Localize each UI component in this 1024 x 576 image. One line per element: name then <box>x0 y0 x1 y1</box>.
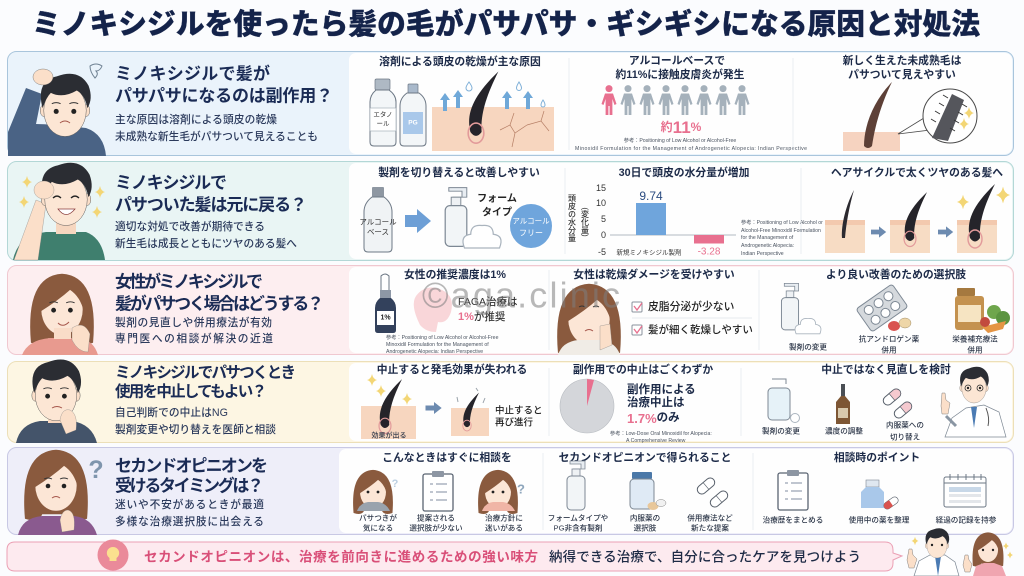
illustration: alcohol base to foam: アルコール <box>359 218 397 226</box>
sub heading: 新しく生えた未成熟毛は <box>843 53 962 67</box>
stat text <box>627 382 696 426</box>
heading <box>115 364 296 400</box>
icon: clipboard treatment history: 治療歴をまとめる <box>763 514 823 524</box>
icon: foam type <box>548 461 608 532</box>
sub heading: 製剤を切り替えると改善しやすい <box>378 165 540 179</box>
bar chart: scalp moisture: 0 <box>601 230 606 240</box>
body text: 製剤変更や切り替えを医師と相談 <box>115 423 276 436</box>
person: doctor pointing <box>941 367 1006 437</box>
sub heading: より良い改善のための選択肢 <box>826 267 966 281</box>
body text: 適切な対処で改善が期待できる <box>115 220 265 233</box>
icon: woman unsure of treatment: 治療方針に <box>485 512 523 522</box>
icon: concentration dropper <box>825 384 863 436</box>
banner message: セカンドオピニオンは、治療を前向きに進めるための強い味方 <box>144 548 538 564</box>
icon: supplements and vegetables: 栄養補充療法 <box>952 334 998 344</box>
stat text: 1.7%のみ <box>627 410 680 426</box>
icon: solvent bottles: ール <box>376 120 390 128</box>
icon: combination capsules: 併用療法など <box>687 512 733 522</box>
heading: ミノキシジルでパサつくとき <box>115 364 296 382</box>
reference: Indian Perspective <box>741 251 784 257</box>
icon: oral medication bottle: 内服薬の <box>630 512 660 522</box>
icon: antiandrogen blister: 併用 <box>881 344 897 354</box>
icon: oral capsules <box>881 387 924 442</box>
heading: ミノキシジルで <box>115 174 227 192</box>
heading: 髪がパサつく場合はどうする？ <box>115 294 324 314</box>
icon: current medication <box>849 480 910 524</box>
bar chart: scalp moisture: -3.28 <box>698 246 721 258</box>
body text <box>115 406 276 436</box>
bar chart: scalp moisture: 9.74 <box>639 189 663 203</box>
illustration: dry scalp <box>432 72 554 151</box>
icon: formulation change <box>762 379 800 436</box>
illustration: immature hair with magnifier <box>843 82 977 151</box>
icon: female head profile <box>414 288 452 332</box>
reference <box>610 429 712 444</box>
body text: 主な原因は溶剤による頭皮の乾燥 <box>115 113 277 126</box>
person: woman with hand on cheek <box>557 284 621 355</box>
body text <box>115 316 273 345</box>
sub heading: 溶剤による頭皮の乾燥が主な原因 <box>379 54 541 68</box>
sub heading: 中止ではなく見直しを検討 <box>821 362 951 376</box>
heading line 2: パサパサになるのは副作用？ <box>115 86 333 106</box>
icon: woman unsure of treatment <box>478 470 525 532</box>
illustration: alcohol base to foam <box>359 187 552 252</box>
icon: antiandrogen blister <box>856 284 920 354</box>
icon: solvent bottles: PG <box>408 120 418 126</box>
stat: 11 percent: 約11% <box>661 118 702 136</box>
reference <box>575 136 807 152</box>
icon: woman unsure of treatment: 迷いがある <box>485 522 523 532</box>
icon: clipboard few options: 提案される <box>417 512 455 522</box>
icon: woman worried about dryness: ? <box>392 478 399 490</box>
body text: 専門医への相談が解決の近道 <box>115 332 273 345</box>
body text <box>115 498 264 528</box>
icon: clipboard treatment history <box>763 470 823 524</box>
body text: 製剤の見直しや併用療法が有効 <box>115 316 272 329</box>
heading: 受けるタイミングは？ <box>115 476 264 496</box>
icon: formulation change: 製剤の変更 <box>762 426 800 436</box>
reference: Minoxidil Formulation for the Management of <box>386 342 489 348</box>
illustration: hair before and after stopping <box>361 374 543 440</box>
heading: 使用を中止してもよい？ <box>115 382 267 400</box>
bar chart: scalp moisture: 新規ミノキシジル製剤 <box>616 248 682 256</box>
person: worried man <box>8 64 106 156</box>
people: doctor and woman <box>907 528 1013 576</box>
icon: combination capsules: 新たな提案 <box>691 522 729 532</box>
reference: 参考：Positioning of Low Alcohol or Alcohol-Free <box>624 136 736 144</box>
heading: パサついた髪は元に戻る？ <box>115 196 307 214</box>
panel: side effect question <box>8 52 1014 156</box>
panel: second opinion question <box>8 448 1014 535</box>
body text: 多様な治療選択肢に出会える <box>115 515 264 528</box>
checklist: 髪が細く乾燥しやすい <box>648 323 753 336</box>
icon: solvent bottles: エタノ <box>373 110 393 118</box>
icon: oral medication bottle: 選択肢 <box>634 522 657 532</box>
callout: FAGA <box>458 295 518 323</box>
icon: current medication: 使用中の薬を整理 <box>849 514 910 524</box>
title: ミノキシジルを使ったら髪の毛がパサパサ・ギシギシになる原因と対処法 <box>32 8 980 41</box>
stat text: 副作用による <box>627 382 696 396</box>
illustration: hair before and after stopping: 再び進行 <box>495 416 534 428</box>
sub heading: 女性は乾燥ダメージを受けやすい <box>573 267 735 281</box>
bar chart: scalp moisture: (変化量) <box>580 207 590 237</box>
icon: combination capsules <box>687 476 733 532</box>
pictogram chart: 1 of 8 people <box>602 85 750 115</box>
icon: supplements and vegetables <box>952 288 1010 354</box>
icon: woman worried about dryness: 気になる <box>363 522 393 532</box>
icon: oral medication bottle <box>630 472 666 532</box>
icon: oral capsules: 切り替え <box>890 432 920 442</box>
illustration: alcohol base to foam: フリー <box>519 228 543 238</box>
sub heading: セカンドオピニオンで得られること <box>559 450 731 464</box>
heading: セカンドオピニオンを <box>115 456 268 476</box>
sub heading: 副作用での中止はごくわずか <box>573 362 713 376</box>
icon: clipboard few options: 選択肢が少ない <box>409 522 463 532</box>
heading: ミノキシジルで髪が <box>115 64 270 84</box>
panel: recovery question <box>8 162 1014 260</box>
body text: 迷いや不安があるときが最適 <box>115 498 264 511</box>
reference: Androgenetic Alopecia: <box>741 243 794 249</box>
icon: foam bottle <box>781 283 827 352</box>
illustration: hair before and after stopping: 中止すると <box>495 404 543 416</box>
illustration: alcohol base to foam: フォーム <box>477 192 517 204</box>
person: thinking man <box>16 360 97 443</box>
icon: concentration dropper: 濃度の調整 <box>825 426 863 436</box>
bar chart: scalp moisture: -5 <box>598 247 606 257</box>
illustration: alcohol base to foam: ベース <box>367 228 389 236</box>
reference: 参考：Low-Dose Oral Minoxidil for Alopecia: <box>610 429 712 437</box>
reference: 参考：Positioning of Low Alcohol or <box>741 218 823 226</box>
icon: antiandrogen blister: 抗アンドロゲン薬 <box>859 334 920 344</box>
sub heading: アルコールベースで <box>629 54 725 67</box>
body text <box>115 220 297 250</box>
heading <box>115 272 324 314</box>
icon: calendar <box>936 474 997 524</box>
body text 2: 未成熟な新生毛がパサついて見えることも <box>115 130 318 143</box>
illustration: 1 percent bottle: 1% <box>380 314 391 322</box>
panel: stop use question <box>8 360 1014 444</box>
person: thinking woman <box>18 450 104 535</box>
callout: FAGA: 1%が推奨 <box>458 310 506 323</box>
sub heading: 女性の推奨濃度は1% <box>404 267 506 281</box>
reference <box>386 333 499 355</box>
reference: Androgenetic Alopecia: Indian Perspective <box>386 349 483 355</box>
body text: 新生毛は成長とともにツヤのある髪へ <box>115 237 297 250</box>
icon: oral capsules: 内服薬への <box>886 420 924 430</box>
person: thinking woman: ? <box>88 456 104 484</box>
sub heading <box>616 54 745 81</box>
person: happy man <box>13 163 105 260</box>
callout: FAGA: FAGA治療は <box>458 295 518 308</box>
illustration: 1 percent bottle <box>375 274 396 333</box>
sub heading <box>843 53 962 81</box>
icon: clipboard few options <box>409 471 463 532</box>
sub heading: 30日で頭皮の水分量が増加 <box>619 165 749 179</box>
checklist <box>632 299 753 336</box>
bar chart: scalp moisture: 5 <box>601 214 606 224</box>
icon: woman unsure of treatment: ? <box>517 482 525 496</box>
sub heading: 約11%に接触皮膚炎が発生 <box>616 67 745 81</box>
sub heading: 相談時のポイント <box>834 450 920 464</box>
illustration: hair cycle <box>825 184 1010 253</box>
heading <box>115 174 307 214</box>
banner subtext: 納得できる治療で、自分に合ったケアを見つけよう <box>549 548 861 564</box>
icon: lightbulb <box>98 540 128 570</box>
bar chart: scalp moisture: 頭皮の水分量 <box>568 194 576 242</box>
bar chart: scalp moisture <box>568 183 736 258</box>
body text: 自己判断での中止はNG <box>115 406 228 419</box>
illustration: alcohol base to foam: アルコール <box>512 216 550 226</box>
checklist: 皮脂分泌が少ない <box>648 299 735 313</box>
icon: supplements and vegetables: 併用 <box>967 344 983 354</box>
icon: woman worried about dryness <box>353 470 399 532</box>
reference: Alcohol-Free Minoxidil Formulation <box>741 228 821 234</box>
watermark: ©aga.clinic <box>422 274 620 316</box>
icon: calendar: 経過の記録を持参 <box>936 514 997 524</box>
heading <box>115 456 268 496</box>
stat text: 治療中止は <box>627 395 685 409</box>
reference <box>741 218 823 257</box>
reference: A Comprehensive Review <box>626 438 686 444</box>
reference: for the Management of <box>741 235 794 241</box>
person: woman <box>22 274 98 355</box>
icon: foam bottle: 製剤の変更 <box>789 342 827 352</box>
sub heading: こんなときはすぐに相談を <box>382 450 512 464</box>
bar chart: scalp moisture: 15 <box>596 183 606 193</box>
bar chart: scalp moisture: 10 <box>596 198 606 208</box>
reference: 参考：Positioning of Low Alcohol or Alcohol-Free <box>386 333 499 341</box>
icon: solvent bottles <box>370 79 426 146</box>
banner <box>7 540 902 571</box>
illustration: alcohol base to foam: タイプ <box>482 206 512 218</box>
illustration: hair before and after stopping: 効果が出る <box>372 430 406 440</box>
icon: foam type: PG非含有製剤 <box>554 522 603 532</box>
reference: Minoxidil Formulation for the Management of Androgenetic Alopecia: Indian Perspective <box>575 146 807 152</box>
sub heading: 中止すると発毛効果が失われる <box>377 362 527 376</box>
pie chart: 1.7 percent <box>560 379 614 433</box>
heading: 女性がミノキシジルで <box>115 272 263 292</box>
sub heading: ヘアサイクルで太くツヤのある髪へ <box>831 165 1003 179</box>
sub heading: パサついて見えやすい <box>848 68 956 81</box>
icon: woman worried about dryness: パサつきが <box>359 512 397 522</box>
icon: foam type: フォームタイプや <box>548 514 608 522</box>
panel: women question <box>8 266 1014 355</box>
